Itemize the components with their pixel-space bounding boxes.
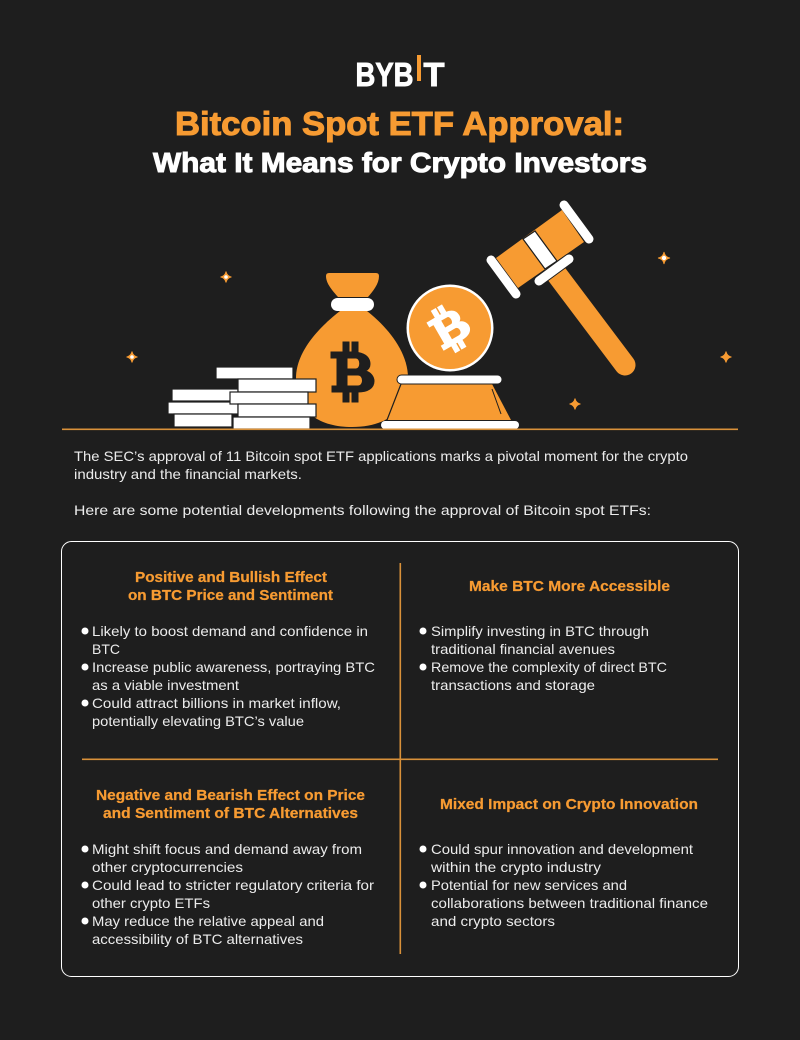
panel section: positive and bullish effect: Positive and Bullish Effect [135, 569, 327, 586]
icon: Bitcoin coin on pedestal [381, 284, 519, 429]
panel section: mixed impact on crypto innovation: within the crypto industry [430, 859, 601, 875]
panel section: make BTC more accessible: Make BTC More Accessible [469, 578, 670, 595]
intro text: industry and the financial markets. [74, 466, 302, 482]
panel section: negative and bearish effect [82, 787, 374, 947]
panel section: mixed impact on crypto innovation: Potential for new services and [431, 877, 627, 893]
ground line [62, 428, 738, 430]
panel section: negative and bearish effect: Negative and Bearish Effect on Price [96, 787, 365, 804]
panel section: positive and bullish effect: on BTC Price and Sentiment [128, 587, 333, 604]
panel section: positive and bullish effect: potentially elevating BTC’s value [92, 713, 304, 729]
panel section: negative and bearish effect: Might shift focus and demand away from [92, 841, 362, 857]
icon: money bag with Bitcoin symbol [296, 273, 408, 427]
panel section: positive and bullish effect: Increase public awareness, portraying BTC [92, 659, 375, 675]
panel section: negative and bearish effect: May reduce the relative appeal and [92, 913, 324, 929]
panel section: mixed impact on crypto innovation: Could spur innovation and development [431, 841, 693, 857]
panel section: mixed impact on crypto innovation: and crypto sectors [431, 913, 555, 929]
title: What It Means for Crypto Investors [153, 147, 647, 178]
panel section: mixed impact on crypto innovation: Mixed Impact on Crypto Innovation [440, 796, 698, 813]
illustration: gavel, coin, money bag and stacks [62, 205, 738, 430]
panel section: make BTC more accessible: Simplify investing in BTC through [431, 623, 649, 639]
panel section: positive and bullish effect: as a viable investment [92, 677, 239, 693]
panel section: make BTC more accessible: transactions and storage [431, 677, 595, 693]
logo: Bybit: BYB [356, 56, 414, 93]
icon: stacks of white bars [168, 367, 316, 429]
intro text: Here are some potential developments following the approval of Bitcoin spot ETFs: [74, 502, 651, 518]
panel section: mixed impact on crypto innovation [420, 796, 708, 929]
panel section: negative and bearish effect: Could lead to stricter regulatory criteria for [92, 877, 374, 893]
panel section: positive and bullish effect: BTC [92, 641, 120, 657]
panel section: mixed impact on crypto innovation: collaborations between traditional finance [431, 895, 708, 911]
panel: developments [62, 542, 738, 976]
icon: sparkles [126, 252, 732, 410]
panel section: negative and bearish effect: other cryptocurrencies [92, 859, 243, 875]
panel section: positive and bullish effect: Could attract billions in market inflow, [92, 695, 341, 711]
icon: gavel [491, 205, 625, 365]
panel section: positive and bullish effect [82, 569, 375, 729]
panel section: positive and bullish effect: Likely to boost demand and confidence in [92, 623, 368, 639]
intro text [74, 448, 688, 518]
panel section: make BTC more accessible: traditional financial avenues [431, 641, 615, 657]
panel section: negative and bearish effect: accessibility of BTC alternatives [92, 931, 303, 947]
panel section: negative and bearish effect: and Sentiment of BTC Alternatives [103, 805, 358, 822]
panel section: make BTC more accessible: Remove the complexity of direct BTC [431, 659, 667, 675]
intro text: The SEC’s approval of 11 Bitcoin spot ETF applications marks a pivotal moment for the crypto [74, 448, 688, 464]
title [153, 105, 647, 178]
title: Bitcoin Spot ETF Approval: [175, 105, 624, 142]
logo: Bybit: T [424, 56, 444, 93]
panel section: negative and bearish effect: other crypto ETFs [92, 895, 210, 911]
panel section: make BTC more accessible [420, 578, 670, 693]
